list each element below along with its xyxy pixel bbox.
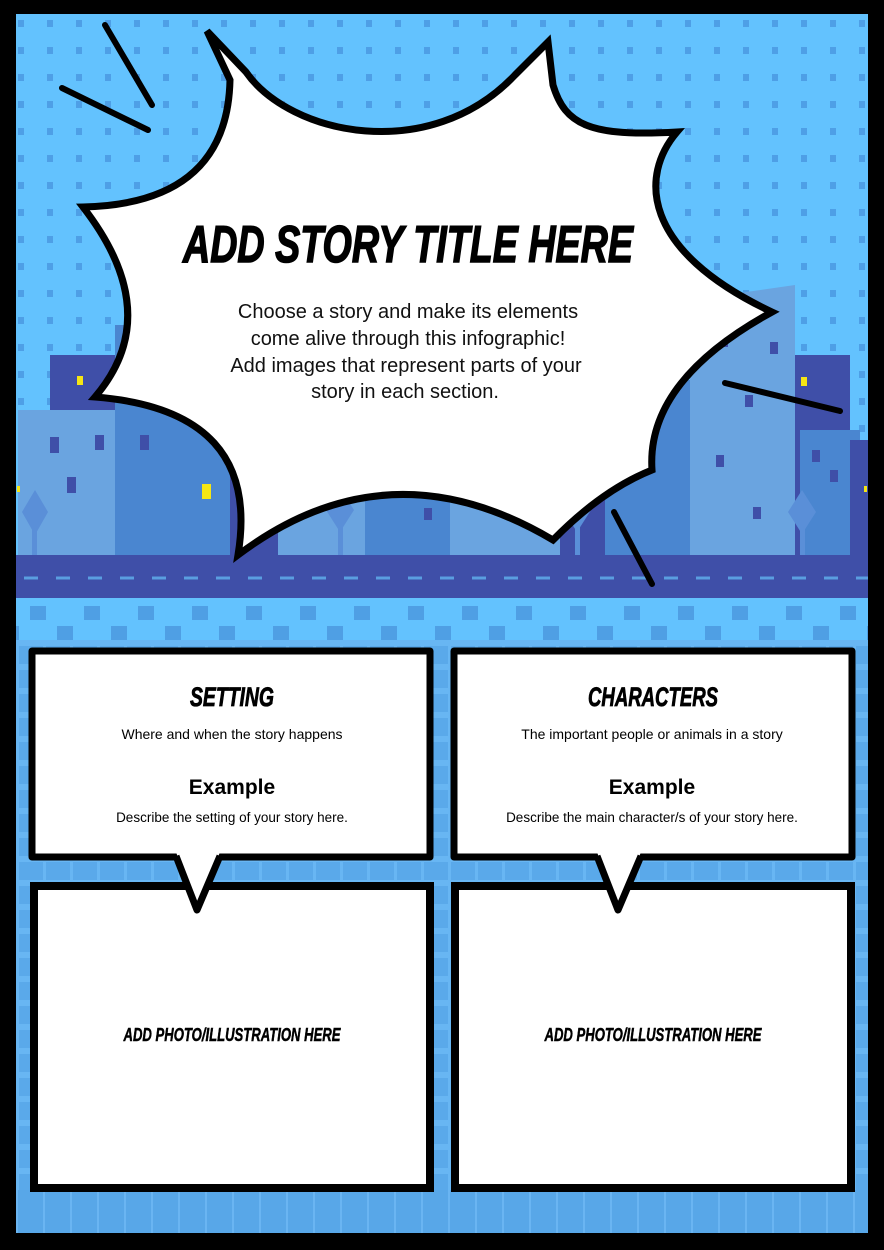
city skyline [17, 285, 868, 555]
panel: setting [32, 651, 430, 857]
photo box: setting [34, 886, 430, 1188]
panel: characters: CHARACTERS [588, 682, 718, 712]
photo box: characters: ADD PHOTO/ILLUSTRATION HERE [544, 1025, 762, 1045]
speech tails [176, 852, 641, 910]
panel: setting: SETTING [190, 682, 274, 712]
intro text [230, 301, 582, 403]
panel: characters: The important people or animals in a story [521, 726, 783, 742]
intro text: story in each section. [311, 381, 499, 403]
title: ADD STORY TITLE HERE [182, 216, 634, 274]
photo box: setting: ADD PHOTO/ILLUSTRATION HERE [123, 1025, 341, 1045]
intro text: come alive through this infographic! [251, 328, 565, 350]
road [16, 555, 868, 598]
title starburst bubble [83, 31, 772, 555]
intro text: Add images that represent parts of your [230, 355, 582, 377]
intro text: Choose a story and make its elements [238, 301, 578, 323]
panel: characters [454, 651, 852, 857]
panel: setting: Describe the setting of your story here. [116, 810, 348, 825]
panel: characters: Describe the main character/s of your story here. [506, 810, 798, 825]
panel: setting: Example [189, 776, 275, 799]
panel: characters: Example [609, 776, 695, 799]
panel: setting: Where and when the story happens [121, 726, 343, 742]
burst strokes [62, 25, 840, 584]
photo box: characters [455, 886, 851, 1188]
